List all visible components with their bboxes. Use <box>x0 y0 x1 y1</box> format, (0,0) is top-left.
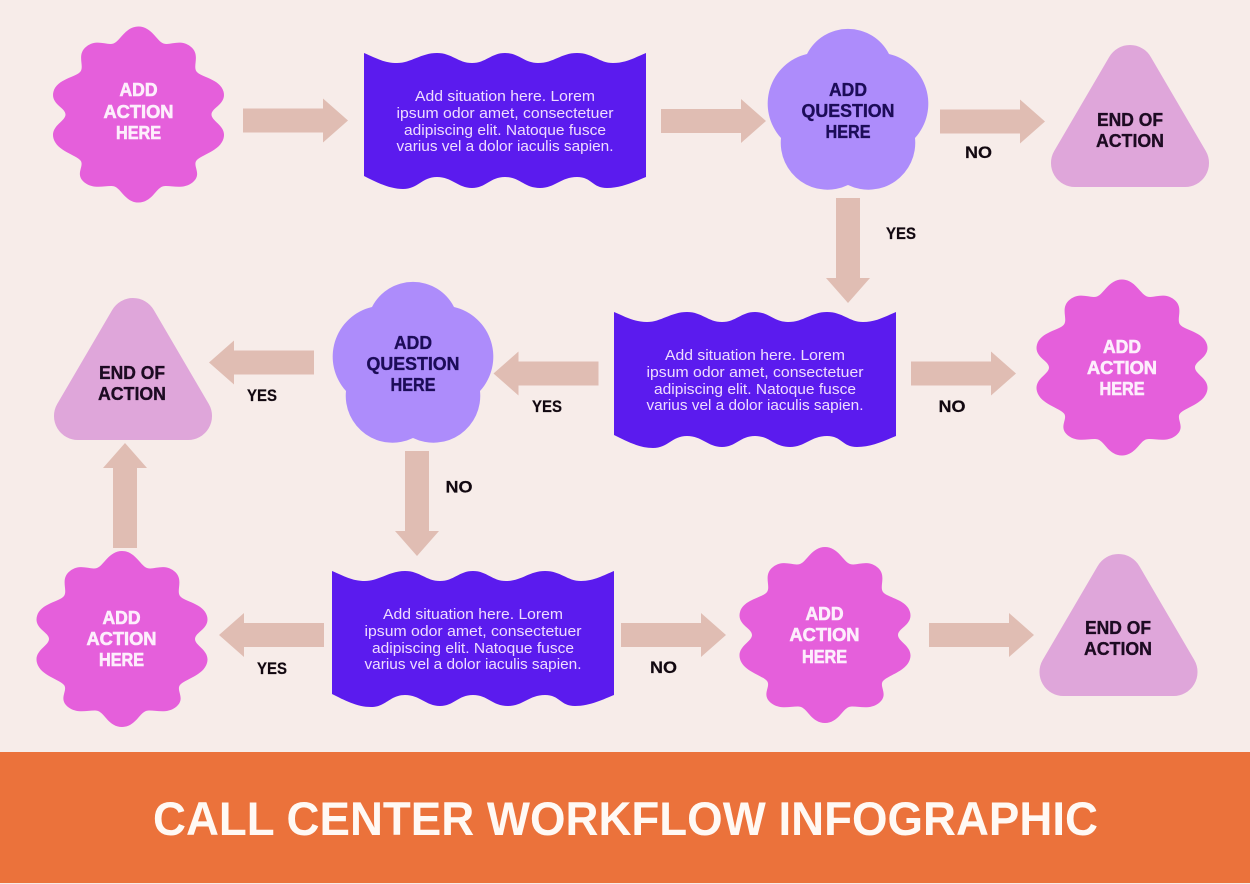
situation box: bottom: ipsum odor amet, consectetuer <box>364 624 582 640</box>
question shape: middle <box>333 282 493 443</box>
end shape: bottom right: ACTION <box>1084 639 1152 659</box>
situation box: top: ipsum odor amet, consectetuer <box>396 106 614 122</box>
label: yes: YES <box>257 659 287 678</box>
situation box: bottom: adipiscing elit. Natoque fusce <box>372 641 574 657</box>
end shape: middle left <box>54 298 212 440</box>
arrow: question down to situation <box>826 198 870 303</box>
action shape: bottom left: ACTION <box>86 629 156 649</box>
question shape: top: ADD <box>829 80 867 100</box>
arrow: question to end <box>940 100 1045 144</box>
situation box: top: adipiscing elit. Natoque fusce <box>404 123 606 139</box>
label: no: NO <box>446 478 472 496</box>
action shape: middle right: ADD <box>1103 337 1141 357</box>
question shape: middle: QUESTION <box>366 354 460 374</box>
arrow: situation to action <box>911 352 1016 396</box>
situation box: bottom <box>332 571 614 707</box>
end shape: bottom right <box>1039 554 1198 696</box>
end shape: top right: END OF <box>1097 110 1163 130</box>
question shape: top: HERE <box>826 122 870 142</box>
situation box: top: varius vel a dolor iaculis sapien. <box>396 139 614 155</box>
action shape: top left <box>53 26 224 202</box>
situation box: top: Add situation here. Lorem <box>415 89 595 105</box>
action shape: top left: ACTION <box>104 102 174 122</box>
action shape: bottom left <box>36 551 208 727</box>
action shape: middle right: HERE <box>1100 379 1144 399</box>
arrow: action to situation <box>243 98 348 142</box>
label: yes: YES <box>886 224 916 243</box>
situation box: middle: adipiscing elit. Natoque fusce <box>654 382 856 398</box>
question shape: middle: HERE <box>390 375 436 395</box>
arrow: question to end <box>209 340 314 384</box>
situation box: middle <box>614 312 896 448</box>
end shape: bottom right: END OF <box>1085 618 1151 638</box>
arrow: situation to question <box>494 352 598 396</box>
arrow: action up to end <box>103 443 147 548</box>
action shape: bottom center: ADD <box>806 604 844 624</box>
situation box: bottom: Add situation here. Lorem <box>383 607 563 623</box>
situation box: bottom: varius vel a dolor iaculis sapien. <box>364 657 582 673</box>
arrow: question down to situation <box>395 451 439 556</box>
action shape: top left: ADD <box>120 80 158 100</box>
title: CALL CENTER WORKFLOW INFOGRAPHIC <box>153 792 1098 845</box>
label: no: NO <box>650 658 677 677</box>
situation box: middle: ipsum odor amet, consectetuer <box>646 365 864 381</box>
question shape: top <box>768 29 928 190</box>
end shape: top right <box>1051 45 1209 187</box>
situation box: top <box>364 53 646 189</box>
arrow: situation to question <box>661 99 766 143</box>
label: no: NO <box>938 397 966 416</box>
action shape: top left: HERE <box>116 123 161 143</box>
action shape: middle right: ACTION <box>1087 358 1157 378</box>
arrow: situation to action <box>621 613 726 657</box>
arrow: action to end <box>929 613 1034 657</box>
action shape: bottom left: ADD <box>102 608 140 628</box>
end shape: middle left: ACTION <box>98 384 166 404</box>
action shape: middle right <box>1036 280 1208 456</box>
title banner <box>0 752 1250 883</box>
situation box: middle: varius vel a dolor iaculis sapien. <box>646 398 864 414</box>
action shape: bottom center <box>739 547 911 723</box>
label: yes: YES <box>532 397 562 416</box>
question shape: middle: ADD <box>394 333 432 353</box>
end shape: middle left: END OF <box>99 363 165 383</box>
action shape: bottom center: HERE <box>802 647 847 667</box>
action shape: bottom center: ACTION <box>790 625 860 645</box>
end shape: top right: ACTION <box>1096 131 1164 151</box>
situation box: middle: Add situation here. Lorem <box>665 348 845 364</box>
label: yes: YES <box>247 386 277 405</box>
question shape: top: QUESTION <box>802 101 894 121</box>
arrow: situation to action <box>219 613 324 657</box>
action shape: bottom left: HERE <box>99 650 144 670</box>
label: no: NO <box>965 143 992 162</box>
